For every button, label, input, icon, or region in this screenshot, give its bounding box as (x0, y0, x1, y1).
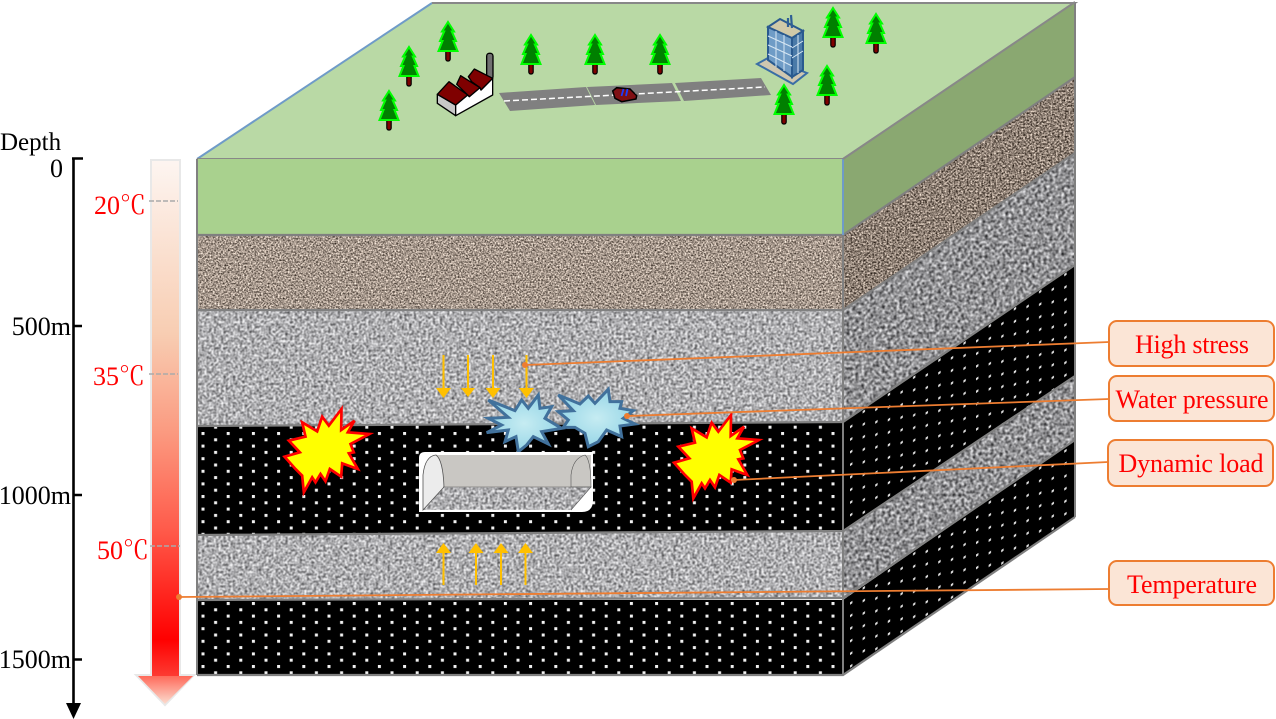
depth label 1500m: 1500m (0, 645, 71, 674)
callout: water pressure (1109, 376, 1274, 421)
depth label 1000m: 1000m (0, 481, 71, 510)
depth label 0: 0 (50, 154, 63, 183)
depth axis (66, 158, 83, 719)
temperature tick dashes (149, 201, 180, 546)
callout: high stress (1109, 321, 1274, 366)
layer: upper granite front (197, 310, 843, 426)
layer: lower granite side (843, 376, 1075, 600)
leader line: high stress (522, 342, 1109, 368)
icon: water burst right (558, 389, 635, 447)
road (499, 78, 771, 111)
leader line: dynamic load (731, 462, 1108, 483)
stress arrows above the tunnel (436, 355, 534, 398)
factory (437, 53, 493, 116)
layer: sandy gravel front (197, 235, 843, 310)
layer: coal seam side (843, 265, 1075, 532)
layer: upper granite side (843, 153, 1075, 423)
layer: coal seam front (197, 422, 843, 535)
trees (380, 8, 886, 130)
car (613, 88, 637, 102)
layer: bottom coal side (843, 440, 1075, 675)
callout: high stress: High stress (1135, 330, 1249, 359)
temperature gradient arrow (136, 160, 194, 705)
top surface (197, 2, 1075, 159)
callout: water pressure: Water pressure (1116, 385, 1268, 414)
layer: lower granite front (197, 531, 843, 600)
leader line: water pressure (624, 399, 1109, 419)
icon: dynamic load burst right (674, 415, 759, 498)
layer: soil front (197, 159, 843, 235)
layer: bottom coal front (197, 600, 843, 675)
layer: soil side (843, 2, 1075, 235)
temperature label 50: 50℃ (97, 536, 149, 565)
depth label 500m: 500m (12, 312, 71, 341)
callout: temperature: Temperature (1127, 570, 1257, 599)
stress arrows below the tunnel (436, 543, 533, 585)
leader line: temperature (176, 589, 1109, 600)
depth heading: Depth (0, 129, 62, 156)
icon: water burst left (487, 395, 562, 452)
surface scene (380, 8, 886, 130)
top back and front edges (197, 3, 1075, 159)
icon: dynamic load burst left (284, 409, 369, 492)
office building (757, 15, 807, 84)
temperature label 20: 20℃ (94, 191, 146, 220)
top edge lines (197, 3, 432, 159)
layer: sandy gravel side (843, 77, 1075, 310)
callout: dynamic load (1108, 440, 1273, 486)
tunnel (419, 452, 593, 512)
callout: dynamic load: Dynamic load (1118, 449, 1264, 478)
callout: temperature (1109, 561, 1274, 605)
temperature label 35: 35℃ (93, 362, 145, 391)
